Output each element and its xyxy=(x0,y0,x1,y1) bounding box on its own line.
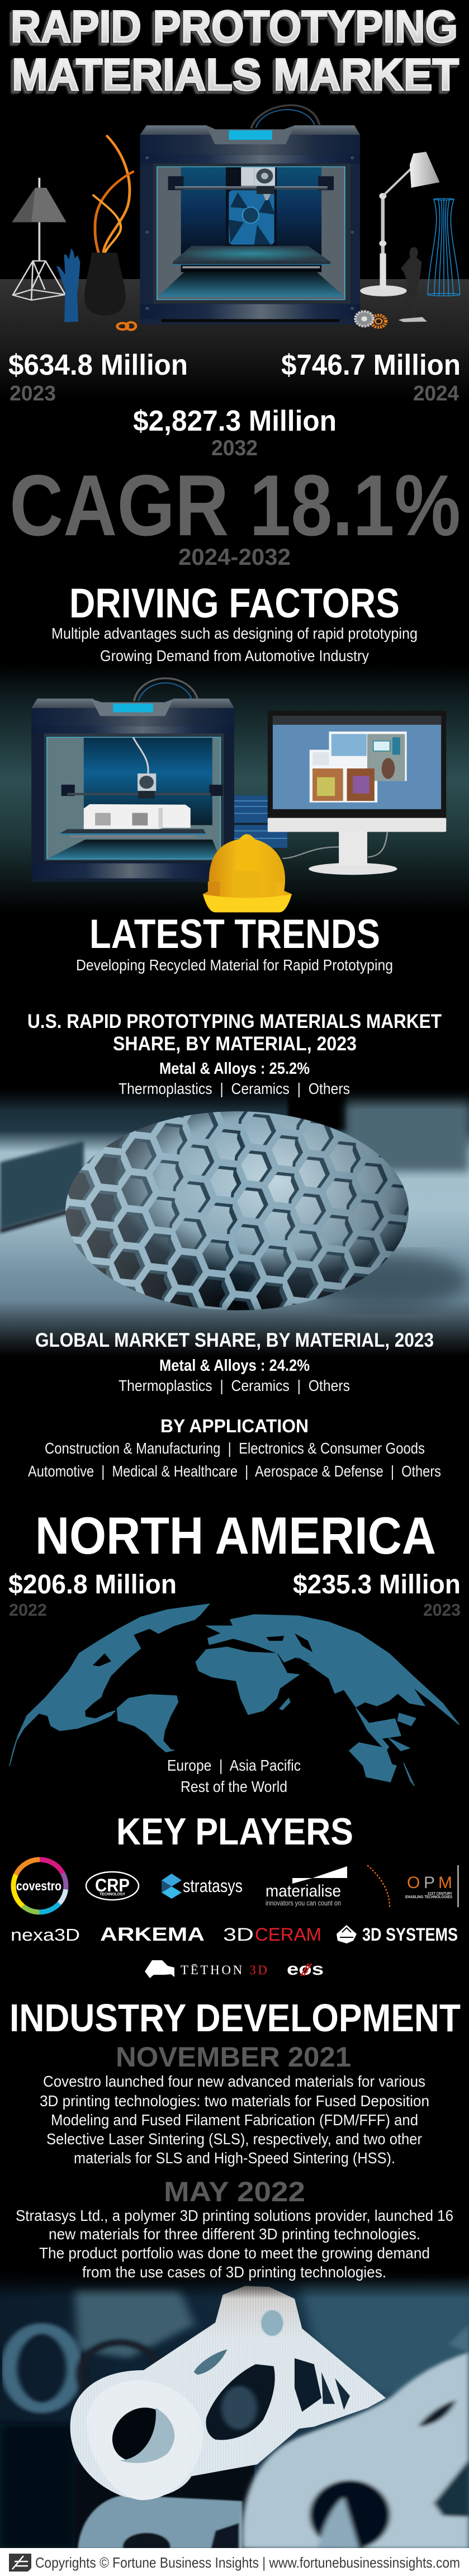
North America 2023 value xyxy=(293,1570,461,1620)
North America 2023 value: 2023 xyxy=(423,1600,461,1620)
heading: north america: NORTH AMERICA xyxy=(35,1506,436,1565)
photo: 3D printed hexagonal lattice xyxy=(0,1088,469,1356)
date: May 2022: MAY 2022 xyxy=(164,2176,305,2207)
North America 2022 value: $206.8 Million xyxy=(8,1570,177,1600)
Americas xyxy=(10,1604,209,1766)
logo: 3DCeram: CERAM xyxy=(255,1924,321,1945)
global other materials: Thermoplastics | Ceramics | Others xyxy=(119,1377,350,1394)
icon: yellow safety helmet xyxy=(203,834,292,912)
lattice object xyxy=(65,1111,409,1310)
logo: CRP Technology xyxy=(86,1872,139,1900)
logo: Materialise: materialise xyxy=(266,1882,341,1900)
by application heading: BY APPLICATION xyxy=(160,1416,309,1437)
inland seas xyxy=(266,1634,312,1664)
development text: Stratasys: The product portfolio was done to meet the growing demand xyxy=(39,2244,430,2262)
development text: Covestro: 3D printing technologies: two materials for Fused Deposition xyxy=(40,2092,429,2110)
date: November 2021: NOVEMBER 2021 xyxy=(116,2041,351,2073)
world globe map xyxy=(10,1604,459,1786)
lower fade xyxy=(0,1300,469,1356)
U.S. market share heading: SHARE, BY MATERIAL, 2023 xyxy=(113,1032,357,1055)
gears xyxy=(356,312,386,327)
photo: white 3D printed bracket xyxy=(0,2275,469,2560)
application list xyxy=(28,1440,441,1480)
title xyxy=(11,2,459,100)
development text: Stratasys: Stratasys Ltd., a polymer 3D printing solutions provider, launched 16 xyxy=(16,2207,453,2224)
heading: driving factors: DRIVING FACTORS xyxy=(69,580,400,626)
logo: Tethon 3D: TĒTHON 3D xyxy=(181,1963,267,1977)
printer gantry and extruder xyxy=(168,167,334,200)
blue wire vase xyxy=(428,199,460,296)
photo backdrop xyxy=(0,2275,469,2549)
logo: CRP Technology: CRP xyxy=(95,1875,130,1895)
development text: Covestro xyxy=(40,2073,429,2167)
logo: OPM xyxy=(368,1865,459,1907)
logo: OPM: ENABLING TECHNOLOGIES xyxy=(405,1895,452,1899)
market size 2023 xyxy=(8,349,188,405)
Africa xyxy=(196,1647,299,1715)
development text: Covestro: materials for SLS and High-Speed Sintering (HSS). xyxy=(74,2149,395,2167)
logo: covestro xyxy=(13,1860,66,1912)
other regions list: Europe | Asia Pacific xyxy=(167,1757,301,1774)
Australia xyxy=(349,1743,396,1782)
logo: covestro: covestro xyxy=(16,1879,61,1893)
market size 2023: 2023 xyxy=(10,382,56,405)
U.S. share value: Metal & Alloys : 25.2% xyxy=(159,1060,310,1078)
market size 2024 xyxy=(281,349,461,405)
upper fade xyxy=(0,2275,469,2299)
North America 2022 value xyxy=(8,1570,177,1620)
printer cables xyxy=(134,678,197,701)
Eurasia xyxy=(206,1615,459,1724)
printer body xyxy=(31,699,234,882)
other regions list xyxy=(167,1757,301,1795)
development text: Covestro: Selective Laser Sintering (SLS), respectively, and two other xyxy=(46,2130,422,2148)
printer cables xyxy=(251,105,319,129)
Southeast Asia islands xyxy=(356,1708,416,1751)
logo: EOS: eos xyxy=(287,1959,324,1979)
logo: Stratasys xyxy=(162,1874,243,1899)
global share value: Metal & Alloys : 24.2% xyxy=(159,1357,310,1375)
Madagascar xyxy=(279,1699,290,1710)
heading: key players: KEY PLAYERS xyxy=(116,1810,353,1853)
table surface xyxy=(0,279,469,399)
printer bed xyxy=(47,829,220,859)
reflection on the surface xyxy=(78,2495,242,2560)
driving factors list xyxy=(51,625,418,664)
development text: Stratasys: new materials for three different 3D printing technologies. xyxy=(49,2225,420,2243)
orange rings xyxy=(117,322,136,330)
logo: Stratasys: stratasys xyxy=(183,1876,243,1896)
black vase xyxy=(84,253,126,315)
North America 2023 value: $235.3 Million xyxy=(293,1570,461,1600)
driving factors list: Multiple advantages such as designing of rapid prototyping xyxy=(51,625,418,642)
photo backdrop xyxy=(0,1088,469,1356)
development text: Covestro: Modeling and Fused Filament Fabrication (FDM/FFF) and xyxy=(51,2111,418,2129)
filament spools xyxy=(234,795,287,848)
logo: Tethon 3D xyxy=(145,1960,267,1978)
market size 2032: 2032 xyxy=(211,436,258,460)
latest trends text: Developing Recycled Material for Rapid Prototyping xyxy=(76,956,393,974)
illustration: printer, monitor and helmet xyxy=(31,678,446,882)
blue hand model xyxy=(56,248,80,322)
floor lamp xyxy=(360,152,439,296)
North America 2022 value: 2022 xyxy=(9,1600,47,1620)
title: MATERIALS MARKET xyxy=(12,50,459,100)
market size 2032: $2,827.3 Million xyxy=(133,405,337,437)
logo: Arkema: ARKEMA xyxy=(100,1924,205,1945)
logo: Materialise: innovators you can count on xyxy=(266,1899,341,1907)
development text: Stratasys: from the use cases of 3D printing technologies. xyxy=(82,2263,386,2281)
logo: OPM: O P M xyxy=(407,1874,452,1892)
orange branches in black vase xyxy=(93,136,133,253)
logo: 3DCeram xyxy=(223,1924,321,1945)
U.S. market share heading xyxy=(27,1010,442,1055)
foreground blurred bracket xyxy=(242,2324,469,2550)
CAGR: 2024-2032 xyxy=(178,544,291,570)
illustration: 3D printer with printed objects xyxy=(12,105,460,330)
panel background: driving factors illustration xyxy=(0,664,469,913)
logo: Nexa3D: nexa3D xyxy=(11,1925,80,1945)
table lamp xyxy=(12,178,67,300)
main bracket xyxy=(70,2286,386,2500)
market size 2024: 2024 xyxy=(413,382,459,405)
printer fan xyxy=(226,167,277,247)
printer body xyxy=(140,125,360,324)
logo: Materialise xyxy=(266,1866,347,1907)
Hudson Bay xyxy=(93,1653,111,1666)
market size 2023: $634.8 Million xyxy=(8,349,188,381)
logo: 3DCeram: 3D xyxy=(223,1924,254,1945)
mannequin figure xyxy=(399,247,427,322)
heading: latest trends: LATEST TRENDS xyxy=(89,912,380,957)
market size 2032 xyxy=(133,405,337,460)
market size 2024: $746.7 Million xyxy=(281,349,461,381)
development text: Covestro: Covestro launched four new advanced materials for various xyxy=(43,2073,425,2090)
monitor with floor plan xyxy=(268,710,446,875)
logo: OPM: 21ST CENTURY xyxy=(428,1892,452,1896)
driving factors list: Growing Demand from Automotive Industry xyxy=(100,647,369,664)
printer bed xyxy=(158,246,345,297)
New Zealand streak xyxy=(404,1763,414,1786)
icon: Fortune Business Insights logo xyxy=(9,2554,31,2572)
logo: CRP Technology: TECHNOLOGY xyxy=(100,1893,125,1896)
printed white building model xyxy=(84,804,191,829)
U.S. other materials: Thermoplastics | Ceramics | Others xyxy=(119,1080,350,1097)
extruder and gantry xyxy=(61,737,223,799)
footer xyxy=(0,2548,469,2576)
other regions list: Rest of the World xyxy=(181,1778,287,1795)
development text: Stratasys xyxy=(16,2207,453,2281)
